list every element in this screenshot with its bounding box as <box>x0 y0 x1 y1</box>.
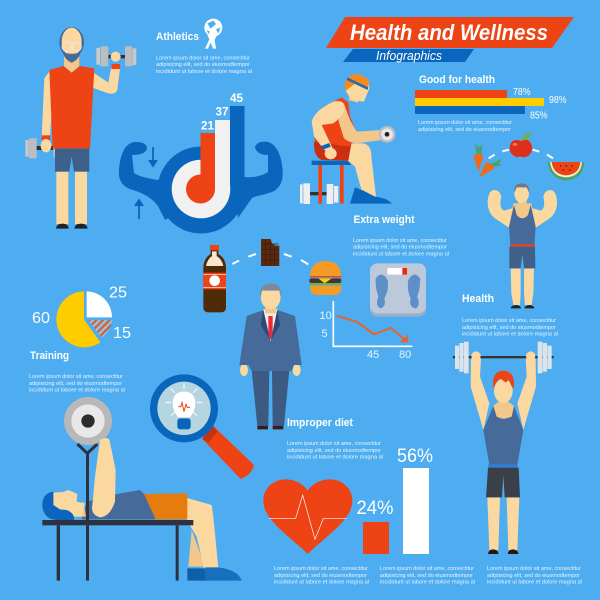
arrow: up <box>135 200 143 219</box>
dashes: junk food arc <box>232 254 308 264</box>
chart values: pie labels: 25 <box>109 284 127 302</box>
chart values: axis labels <box>320 310 411 361</box>
heading: Improper diet: Improper diet <box>287 417 353 429</box>
chart: pie <box>56 291 112 347</box>
icon: apple <box>510 133 532 157</box>
text: athletics description <box>156 56 252 75</box>
title banner <box>326 17 574 48</box>
bar chart: good for health <box>415 87 567 122</box>
text: athletics description: Lorem ipsum dolor sit ame, consectitur <box>156 56 250 62</box>
text: health description: adipisicing elit, sed do eiusmodtempor <box>462 325 556 331</box>
icon: soda bottle <box>203 245 226 312</box>
text: heart description: incididunt ut labore et dolore magna al <box>274 580 369 586</box>
text: health description: incididunt ut labore et dolore magna al <box>462 332 558 338</box>
text: improper diet description: incididunt ut labore et dolore magna al <box>287 454 383 460</box>
subtitle banner <box>343 49 474 63</box>
text: weightlifter description: incididunt ut labore et dolore magna al <box>487 580 582 586</box>
bar chart: percentages: 56% <box>397 446 433 467</box>
icon: weighing scale <box>370 263 426 317</box>
chart values: axis labels: 10 <box>320 310 332 322</box>
icon: heart with pulse <box>263 479 352 554</box>
icon: carrots <box>473 144 502 178</box>
icon: atlas holding globe <box>204 19 222 49</box>
bar chart: percentages <box>356 446 433 554</box>
text: athletics description: incididunt ut labore et dolore magna al <box>156 69 252 75</box>
text: weightlifter description: Lorem ipsum dolor sit ame, consectitur <box>487 566 581 572</box>
icon: watermelon <box>548 162 584 180</box>
text: bars description: incididunt ut labore et dolore magna al <box>380 580 475 586</box>
figure: seated man curling dumbbell <box>300 74 395 204</box>
figure: athlete with dumbbells <box>25 27 136 229</box>
bar chart: good for health: 78% <box>513 87 531 98</box>
heading: Extra weight: Extra weight <box>354 214 415 226</box>
text: bars description: Lorem ipsum dolor sit ame, consectitur <box>380 566 474 572</box>
text: weightlifter description: adipisicing elit, sed do eiusmodtempor <box>487 573 580 579</box>
text: extra weight description <box>353 238 449 258</box>
chart values: axis labels: 5 <box>322 328 328 340</box>
icon: magnifier with light bulb <box>150 374 254 479</box>
chart values: 21 <box>201 118 214 132</box>
figure: man bench pressing <box>42 397 242 581</box>
text: bars description <box>380 566 475 586</box>
bar chart: good for health: 85% <box>530 110 548 122</box>
text: extra weight description: incididunt ut labore et dolore magna al <box>353 252 449 258</box>
figure: man lifting barbell <box>453 342 554 554</box>
chart values: pie labels <box>32 284 131 342</box>
text: health description: Lorem ipsum dolor sit ame, consectitur <box>462 318 556 324</box>
text: training description: incididunt ut labore et dolore magna al <box>29 388 125 394</box>
chart values <box>201 91 243 132</box>
text: improper diet description: Lorem ipsum dolor sit ame, consectitur <box>287 441 381 447</box>
chart values: axis labels: 80 <box>399 349 411 361</box>
text: improper diet description <box>287 441 383 460</box>
subtitle banner: Infographics <box>376 49 442 63</box>
heading: Health: Health <box>462 293 494 305</box>
chart: muscle arms bar rings <box>119 106 283 234</box>
text: heart description <box>274 566 369 586</box>
bar chart: good for health: 98% <box>549 95 567 106</box>
chart values: axis labels: 45 <box>367 349 379 361</box>
figure: overweight businessman <box>239 283 302 429</box>
text: training description: adipisicing elit, sed do eiusmodtempor <box>29 381 122 387</box>
text: health description <box>462 318 558 338</box>
text: good for health description: Lorem ipsum dolor sit ame, consectitur <box>418 120 512 126</box>
chart values: pie labels: 60 <box>32 310 50 327</box>
arrow: down <box>149 147 157 166</box>
dashes: fruit arc <box>489 150 553 158</box>
text: bars description: adipisicing elit, sed do eiusmodtempor <box>380 573 473 579</box>
heading: Good for health: Good for health <box>419 74 495 86</box>
text: improper diet description: adipisicing elit, sed do eiusmodtempor <box>287 448 381 454</box>
text: good for health description <box>418 120 512 133</box>
chart values: 45 <box>230 91 243 105</box>
heading: Athletics: Athletics <box>156 31 199 43</box>
chart: weight line <box>333 301 412 346</box>
text: heart description: Lorem ipsum dolor sit ame, consectitur <box>274 566 368 572</box>
text: athletics description: adipisicing elit, sed do eiusmodtempor <box>156 62 250 68</box>
text: extra weight description: adipisicing elit, sed do eiusmodtempor <box>353 245 447 251</box>
figure: flexing man <box>488 183 557 308</box>
chart values: pie labels: 15 <box>113 325 131 342</box>
text: heart description: adipisicing elit, sed do eiusmodtempor <box>274 573 367 579</box>
text: training description: Lorem ipsum dolor sit ame, consectitur <box>29 374 123 380</box>
text: good for health description: adipisicing elit, sed do eiusmodtempor <box>418 127 511 133</box>
icon: chocolate bar <box>261 239 279 266</box>
text: training description <box>29 374 125 394</box>
heading: Training: Training <box>30 350 69 362</box>
bar chart: percentages: 24% <box>356 498 394 519</box>
text: extra weight description: Lorem ipsum dolor sit ame, consectitur <box>353 238 447 244</box>
chart values: 37 <box>216 104 229 118</box>
text: weightlifter description <box>487 566 582 586</box>
icon: burger <box>309 261 341 295</box>
title banner: Health and Wellness <box>350 20 548 45</box>
